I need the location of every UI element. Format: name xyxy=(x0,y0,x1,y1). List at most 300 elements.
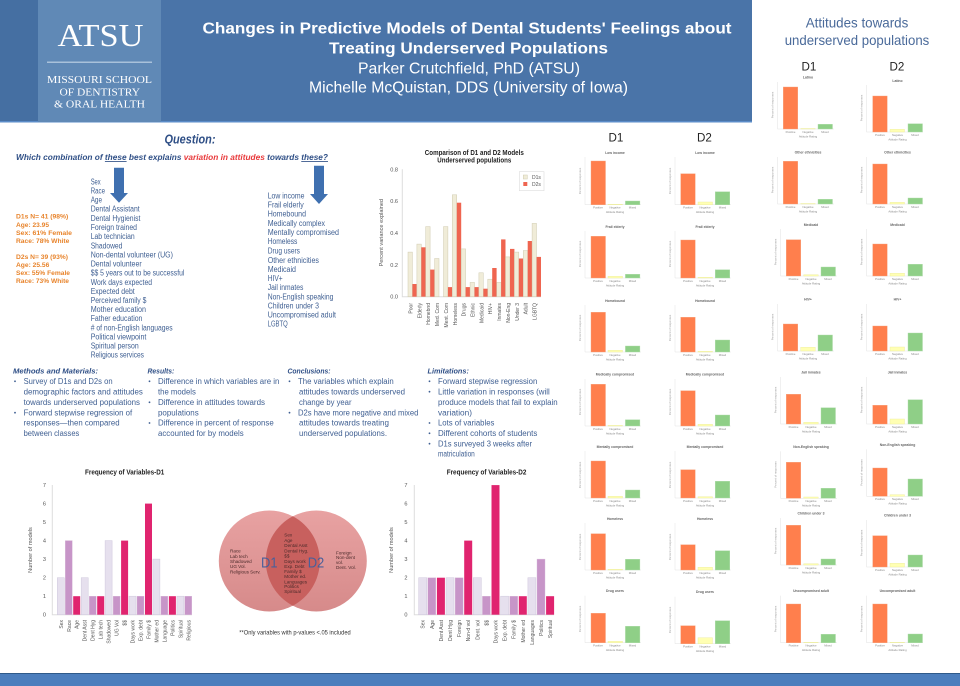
text block: conclusions xyxy=(288,366,418,438)
small chart: uncompromised adult D2: Uncompromised adult xyxy=(880,589,916,593)
predictor variable list: Lab technician xyxy=(91,232,135,241)
venn diagram: D1 and D2 variables: Dental Asst xyxy=(284,543,308,548)
text block: conclusions: D2s have more negative and mixed xyxy=(298,408,418,417)
venn diagram: D1 and D2 variables: Foreign xyxy=(336,550,352,555)
small chart: latino D2: Positive xyxy=(875,133,885,137)
small chart: uncompromised adult D1: Percent of responses xyxy=(774,605,778,632)
underserved population list: Children under 3 xyxy=(268,301,319,310)
small chart: medically compromised D1: Attitude Rating xyxy=(606,431,625,435)
venn diagram: D1 and D2 variables: Dent. Vol. xyxy=(336,565,356,570)
small chart: homebound D1: Attitude Rating xyxy=(606,357,625,361)
small chart: homeless D2: Homeless xyxy=(697,517,713,521)
text block: limitations xyxy=(428,366,558,459)
small chart: frail elderly D1: Negative xyxy=(609,279,621,283)
small chart: non-English speaking D2: Attitude Rating xyxy=(888,502,907,506)
small chart: uncompromised adult D1 xyxy=(774,589,837,652)
bar chart: frequency of variables D1: Dent Asst xyxy=(83,619,89,641)
small chart: other ethnicities D1: Attitude Rating xyxy=(799,209,818,213)
small chart: mentally compromised D1: Percent of responses xyxy=(578,461,582,488)
small chart: low income D2: Mixed xyxy=(719,206,727,210)
bar chart: frequency of variables D1: Politics xyxy=(170,620,176,636)
small chart: other ethnicities D2: Negative xyxy=(892,205,903,209)
small chart: medicaid D1: Positive xyxy=(789,277,799,281)
small chart: homebound D2 xyxy=(668,299,731,361)
small chart: medically compromised D1: Medically compromised xyxy=(596,372,634,376)
sample demographics: Race: 78% White xyxy=(16,238,70,245)
poster title and authors xyxy=(202,20,732,96)
small chart: medicaid D1: Attitude Rating xyxy=(802,281,821,285)
bar chart: frequency of variables D1: Race xyxy=(67,620,73,632)
bar chart: frequency of variables D2: 1 xyxy=(404,594,408,600)
small chart: homebound D2: Negative xyxy=(699,353,711,357)
small chart: frail elderly D2 xyxy=(668,225,731,287)
small chart: latino D2: Attitude Rating xyxy=(888,137,907,141)
small chart: homeless D2: Mixed xyxy=(719,571,727,575)
chart legend xyxy=(519,172,544,191)
bar chart: frequency of variables D1: Dent Hyg xyxy=(91,620,97,641)
small chart: frail elderly D1: Frail elderly xyxy=(605,225,625,229)
small chart: children under 3 D1: Attitude Rating xyxy=(802,570,821,574)
predictor variable list: Foreign trained xyxy=(91,223,137,232)
small chart: HIV+ D1: Positive xyxy=(786,352,796,356)
small chart: homebound D2: Positive xyxy=(683,353,693,357)
predictor variable list: Dental Hygienist xyxy=(91,214,141,223)
arrow: predictors xyxy=(110,168,128,203)
small chart: drug users D1: Attitude Rating xyxy=(606,648,625,652)
text block: results: Results: xyxy=(148,366,175,375)
small chart: medically compromised D1: Percent of responses xyxy=(578,388,582,415)
small chart: other ethnicities D1: Positive xyxy=(786,205,796,209)
small chart: uncompromised adult D2: Percent of responses xyxy=(860,605,864,632)
small chart: HIV+ D2: HIV+ xyxy=(894,298,901,302)
bar chart: comparison of D1 and D2 models: Underserved populations xyxy=(437,158,511,164)
small chart: drug users D2: Percent of responses xyxy=(668,606,672,633)
small chart: other ethnicities D2: Mixed xyxy=(911,205,919,209)
predictor variable list: Work days expected xyxy=(91,278,152,287)
small chart: latino D1 xyxy=(770,76,834,138)
bar chart: comparison of D1 and D2 models: HIV+ xyxy=(488,303,494,314)
bar chart: frequency of variables D1: 3 xyxy=(43,557,46,563)
small chart: jail inmates D1: Negative xyxy=(805,425,817,429)
logo: ATSU Missouri School of Dentistry: MISSOURI SCHOOL xyxy=(47,75,152,86)
text block: conclusions: Conclusions: xyxy=(288,366,331,375)
venn diagram: D1 and D2 variables: Spiritual xyxy=(284,589,301,594)
bar chart: frequency of variables D1: Mother ed xyxy=(154,620,160,643)
small chart: uncompromised adult D2 xyxy=(860,589,923,652)
bar chart: frequency of variables D1: Sex xyxy=(59,620,65,629)
small chart: non-English speaking D1: Positive xyxy=(789,499,799,503)
small chart: non-English speaking D2: Percent of responses xyxy=(860,459,864,486)
sample demographics: Age: 23.95 xyxy=(16,222,49,229)
bar chart: frequency of variables D1: Exp. debt xyxy=(138,619,144,641)
small chart: drug users D2: Positive xyxy=(683,644,693,648)
small chart: non-English speaking D1: Attitude Rating xyxy=(802,504,821,508)
arrow: populations xyxy=(310,166,328,204)
small chart: medically compromised D2: Positive xyxy=(683,427,693,431)
predictor variable list: Spiritual person xyxy=(91,342,139,351)
question heading: Question: xyxy=(164,132,216,146)
small chart: other ethnicities D1: Mixed xyxy=(821,205,829,209)
bar chart: frequency of variables D2: 6 xyxy=(404,502,408,508)
bar chart: frequency of variables D2: Foreign xyxy=(457,620,463,637)
heading: attitudes towards underserved populations: underserved populations xyxy=(785,32,929,48)
small chart: mentally compromised D1 xyxy=(578,445,641,507)
small chart: other ethnicities D2: Other ethnicities xyxy=(884,150,911,154)
small chart: homeless D2: Attitude Rating xyxy=(696,575,715,579)
text block: conclusions: underserved populations. xyxy=(299,429,387,438)
small chart: medicaid D2: Negative xyxy=(892,277,903,281)
text block: methods and materials: Methods and Materials: xyxy=(13,366,99,375)
footer bar xyxy=(0,673,960,686)
small chart: medically compromised D2 xyxy=(668,372,731,435)
bar chart: frequency of variables D1: Shadowed xyxy=(107,620,113,644)
small chart: uncompromised adult D2: Attitude Rating xyxy=(888,648,907,652)
venn diagram: D1 and D2 variables: Sex xyxy=(284,533,293,538)
small chart: medically compromised D2: Negative xyxy=(699,427,711,431)
small chart: homeless D1: Mixed xyxy=(629,571,637,575)
small chart: drug users D2: Negative xyxy=(699,644,711,648)
bar chart: frequency of variables D1: 1 xyxy=(43,594,46,600)
small chart: uncompromised adult D1: Uncompromised adult xyxy=(793,589,830,593)
small chart: other ethnicities D2: Positive xyxy=(875,205,885,209)
small chart: latino D2: Negative xyxy=(892,133,903,137)
underserved population list: Frail elderly xyxy=(268,201,304,210)
venn diagram: D1 and D2 variables: Family $ xyxy=(284,569,302,574)
small chart: medically compromised D1 xyxy=(578,372,641,435)
small chart: drug users D2: Attitude Rating xyxy=(696,649,715,653)
predictor variable list: Expected debt xyxy=(91,287,135,296)
bar chart: frequency of variables D2: Sex xyxy=(421,620,427,629)
small chart: children under 3 D2 xyxy=(860,514,923,576)
small chart: low income D1: Negative xyxy=(609,206,621,210)
small chart: low income D1: Attitude Rating xyxy=(606,210,625,214)
text block: limitations: variation) xyxy=(438,408,472,417)
small chart: frail elderly D2: Negative xyxy=(699,279,711,283)
small chart: HIV+ D2: Negative xyxy=(892,352,903,356)
small chart: medically compromised D2: Mixed xyxy=(719,427,727,431)
small chart: frail elderly D1: Attitude Rating xyxy=(606,283,625,287)
small chart: frail elderly D1: Percent of responses xyxy=(578,240,582,267)
small chart: homeless D1 xyxy=(578,517,641,579)
bar chart: comparison of D1 and D2 models: Poor xyxy=(408,303,414,314)
small chart: HIV+ D2: Percent of responses xyxy=(860,313,864,340)
text block: results: accounted for by models xyxy=(158,429,244,438)
small chart: children under 3 D1: Negative xyxy=(805,566,817,570)
underserved population list: Jail inmates xyxy=(268,283,303,292)
text block: results: the models xyxy=(158,387,196,396)
small chart: other ethnicities D1: Other ethnicities xyxy=(795,150,821,154)
text block: limitations: matriculation xyxy=(438,450,475,459)
bar chart: frequency of variables D1: Frequency of Variables-D1 xyxy=(85,470,164,477)
text block: limitations: D1s surveyed 3 weeks after xyxy=(438,439,532,448)
small chart: children under 3 D2: Negative xyxy=(892,568,903,572)
bar chart: frequency of variables D1: $$ xyxy=(123,620,129,626)
bar chart: frequency of variables D1: Religious xyxy=(186,620,192,641)
small chart: non-English speaking D2: Positive xyxy=(875,497,885,501)
small chart: non-English speaking D2: Mixed xyxy=(911,497,919,501)
small chart: homebound D1: Negative xyxy=(609,353,621,357)
small chart: drug users D1 xyxy=(578,589,641,652)
small chart: homeless D1: Attitude Rating xyxy=(606,575,625,579)
venn diagram: D1 and D2 variables: Age xyxy=(284,538,293,543)
small chart: mentally compromised D2: Negative xyxy=(699,499,711,503)
text block: results: Difference in percent of response xyxy=(158,419,274,428)
bar chart: comparison of D1 and D2 models: 0.6 xyxy=(390,199,398,205)
predictor variable list: Religious services xyxy=(91,351,144,360)
logo: ATSU Missouri School of Dentistry: ATSU xyxy=(58,17,144,53)
small chart: HIV+ D2 xyxy=(860,298,923,360)
bar chart: comparison of D1 and D2 models: Homebnd xyxy=(426,303,432,325)
text block: conclusions: attitudes towards underserved xyxy=(299,387,405,396)
bar chart: frequency of variables D1: Spiritual xyxy=(178,620,184,638)
venn diagram: D1 and D2 variables: Race xyxy=(230,549,241,554)
text block: results: populations xyxy=(158,408,199,417)
bar chart: frequency of variables D2: Dent Hyg xyxy=(448,620,454,641)
bar chart: frequency of variables D1: 4 xyxy=(43,539,46,545)
venn diagram: D1 and D2 variables: vol. xyxy=(336,560,343,565)
poster title and authors: Parker Crutchfield, PhD (ATSU) xyxy=(358,60,580,78)
small chart: mentally compromised D2: Positive xyxy=(683,499,693,503)
small chart: medicaid D1: Negative xyxy=(805,277,817,281)
small chart: children under 3 D2: Children under 3 xyxy=(884,514,911,518)
bar chart: frequency of variables D1: 7 xyxy=(43,483,46,489)
small chart: frail elderly D2: Frail elderly xyxy=(695,225,715,229)
small chart: frail elderly D2: Percent of responses xyxy=(668,240,672,267)
small chart: children under 3 D2: Positive xyxy=(875,568,885,572)
sample demographics: Sex: 61% Female xyxy=(16,230,72,237)
small chart: jail inmates D1: Positive xyxy=(789,425,799,429)
small chart: low income D2: Attitude Rating xyxy=(696,210,715,214)
sample demographics: Sex: 55% Female xyxy=(16,270,70,277)
small chart: HIV+ D1 xyxy=(770,298,834,360)
text block: limitations: Different cohorts of students xyxy=(438,429,537,438)
column heading: D2 left: D2 xyxy=(697,132,712,145)
text block: results: Difference in which variables are in xyxy=(158,377,279,386)
bar chart: frequency of variables D1: 5 xyxy=(43,520,46,526)
small chart: children under 3 D2: Mixed xyxy=(911,568,919,572)
sample demographics xyxy=(16,214,72,285)
bar chart: frequency of variables D2: 2 xyxy=(404,576,408,582)
chart legend: D2s xyxy=(532,182,541,188)
small chart: jail inmates D2: Negative xyxy=(892,425,903,429)
small chart: homeless D1: Negative xyxy=(609,571,621,575)
bar chart: comparison of D1 and D2 models: Adult xyxy=(524,302,530,314)
small chart: medically compromised D1: Mixed xyxy=(629,427,637,431)
small chart: low income D2: Negative xyxy=(699,206,711,210)
underserved population list: Mentally compromised xyxy=(268,228,339,237)
predictor variable list: Sex xyxy=(91,177,101,186)
small chart: medically compromised D2: Medically compromised xyxy=(686,372,724,376)
small chart: jail inmates D1 xyxy=(774,370,837,433)
small chart: medically compromised D1: Positive xyxy=(593,427,603,431)
small chart: non-English speaking D2: Negative xyxy=(892,497,903,501)
predictor variable list: Age xyxy=(91,196,102,205)
predictor variable list: $$ 5 years out to be successful xyxy=(91,269,185,278)
small chart: homeless D1: Homeless xyxy=(607,517,623,521)
small chart: latino D1: Latino xyxy=(803,76,813,80)
header banner xyxy=(0,0,752,122)
venn diagram: D1 and D2 variables: Non-dent xyxy=(336,555,356,560)
small chart: uncompromised adult D1: Mixed xyxy=(824,644,832,648)
predictor variable list xyxy=(91,177,185,360)
predictor variable list: Dental Assistant xyxy=(91,205,140,214)
text block: conclusions: The variables which explain xyxy=(298,377,394,386)
bar chart: frequency of variables D2: Days work xyxy=(494,620,500,643)
bar chart: comparison of D1 and D2 models: Under 3 xyxy=(515,303,521,321)
question sentence: Which combination of these best explains variation in attitudes towards these? xyxy=(16,152,328,162)
small chart: drug users D2: Drug users xyxy=(696,590,714,594)
small chart: HIV+ D1: Negative xyxy=(802,352,814,356)
bar chart: comparison of D1 and D2 models: Homeless xyxy=(453,303,459,325)
underserved population list: Medically complex xyxy=(268,219,325,228)
bar chart: frequency of variables D1: Lab tech xyxy=(99,620,105,639)
small chart: other ethnicities D2: Percent of responses xyxy=(860,166,864,193)
bar chart: comparison of D1 and D2 models: Drugs xyxy=(462,303,468,316)
bar chart: frequency of variables D1: 0 xyxy=(43,613,46,619)
heading: attitudes towards underserved populations xyxy=(785,14,929,48)
bar chart: frequency of variables D1: Language xyxy=(162,620,168,642)
text block: methods and materials: towards underserved populations xyxy=(24,398,140,407)
small chart: homebound D2: Homebound xyxy=(695,299,715,303)
small chart: medicaid D1: Mixed xyxy=(824,277,832,281)
small chart: children under 3 D1: Percent of responses xyxy=(774,527,778,554)
small chart: non-English speaking D1: Percent of responses xyxy=(774,461,778,488)
bar chart: frequency of variables D2: Family $ xyxy=(512,620,518,639)
small chart: non-English speaking D1 xyxy=(774,445,837,508)
bar chart: frequency of variables D2: Spiritual xyxy=(548,620,554,638)
bar chart: frequency of variables D2: Languages xyxy=(530,620,536,645)
small chart: low income D1: Mixed xyxy=(629,206,637,210)
small chart: jail inmates D1: Mixed xyxy=(824,425,832,429)
text block: conclusions: attitudes towards treating xyxy=(299,419,389,428)
small chart: low income D2 xyxy=(668,151,731,214)
venn diagram: D1 and D2 variables: Exp. Debt xyxy=(284,564,305,569)
small chart: non-English speaking D1: Negative xyxy=(805,499,817,503)
bar chart: frequency of variables D2: Politics xyxy=(539,620,545,636)
small chart: latino D2: Percent of responses xyxy=(860,94,864,121)
small chart: jail inmates D2: Mixed xyxy=(911,425,919,429)
underserved population list: Low income xyxy=(268,191,305,200)
poster title and authors: Treating Underserved Populations xyxy=(329,40,608,58)
venn diagram: D1 and D2 variables: Religious Serv. xyxy=(230,570,261,575)
small chart: low income D1: Positive xyxy=(593,206,603,210)
small chart: drug users D1: Percent of responses xyxy=(578,605,582,632)
bar chart: frequency of variables D2: Number of models xyxy=(389,527,395,573)
small chart: low income D2: Positive xyxy=(683,206,693,210)
bar chart: comparison of D1 and D2 models: Med. Com xyxy=(435,303,441,326)
small chart: drug users D2 xyxy=(668,590,731,653)
small chart: frail elderly D2: Mixed xyxy=(719,279,727,283)
logo: ATSU Missouri School of Dentistry xyxy=(38,0,161,122)
small chart: uncompromised adult D2: Mixed xyxy=(911,644,919,648)
small chart: jail inmates D2: Percent of responses xyxy=(860,386,864,413)
underserved population list: Medicaid xyxy=(268,265,296,274)
small chart: HIV+ D2: Positive xyxy=(875,352,885,356)
bar chart: comparison of D1 and D2 models: Ethnic xyxy=(470,303,476,317)
underserved population list: Homeless xyxy=(268,237,297,246)
small chart: medically compromised D2: Percent of responses xyxy=(668,388,672,415)
small chart: uncompromised adult D1: Positive xyxy=(789,644,799,648)
small chart: jail inmates D1: Attitude Rating xyxy=(802,429,821,433)
small chart: homeless D1: Positive xyxy=(593,571,603,575)
venn diagram: D1 and D2 variables: Dental Hyg. xyxy=(284,548,308,553)
small chart: drug users D1: Mixed xyxy=(629,644,637,648)
small chart: latino D1: Percent of responses xyxy=(770,91,774,118)
small chart: HIV+ D2: Attitude Rating xyxy=(888,356,907,360)
bar chart: frequency of variables D1: Family $ xyxy=(146,620,152,639)
small chart: latino D1: Attitude Rating xyxy=(799,134,818,138)
predictor variable list: Shadowed xyxy=(91,242,122,251)
sample demographics: D2s N= 39 (93%) xyxy=(16,254,68,261)
small chart: other ethnicities D1 xyxy=(770,150,834,213)
small chart: uncompromised adult D1: Negative xyxy=(805,644,817,648)
small chart: homeless D2: Percent of responses xyxy=(668,533,672,560)
bar chart: frequency of variables D2: Dent. vol xyxy=(475,620,481,640)
small chart: latino D1: Negative xyxy=(802,130,814,134)
predictor variable list: Race xyxy=(91,186,105,196)
bar chart: frequency of variables D1: Number of models xyxy=(28,527,34,573)
bar chart: frequency of variables D2: 7 xyxy=(404,483,408,489)
underserved population list: Uncompromised adult xyxy=(268,311,337,320)
small chart: mentally compromised D2: Percent of responses xyxy=(668,461,672,488)
small chart: latino D1: Positive xyxy=(786,130,796,134)
small chart: jail inmates D2: Jail inmates xyxy=(888,370,907,374)
small chart: medicaid D2: Attitude Rating xyxy=(888,281,907,285)
small chart: mentally compromised D2: Mixed xyxy=(719,499,727,503)
small chart: jail inmates D2: Positive xyxy=(875,425,885,429)
bar chart: frequency of variables D2: Exp. debt xyxy=(503,619,509,641)
small chart: mentally compromised D1: Attitude Rating xyxy=(606,503,625,507)
small chart: children under 3 D2: Attitude Rating xyxy=(888,572,907,576)
bar chart: frequency of variables D2: Dent Asst xyxy=(439,619,445,641)
bar chart: frequency of variables D1: Days work xyxy=(130,620,136,643)
small chart: medicaid D1 xyxy=(774,223,837,285)
small chart: other ethnicities D1: Percent of responses xyxy=(770,166,774,193)
bar chart: comparison of D1 and D2 models: Elderly xyxy=(417,303,423,318)
predictor variable list: Non-dental volunteer (UG) xyxy=(91,250,173,260)
bar chart: frequency of variables D1 xyxy=(28,470,192,644)
poster title and authors: Michelle McQuistan, DDS (University of Iowa) xyxy=(309,80,628,96)
bar chart: comparison of D1 and D2 models: Inmates xyxy=(497,303,503,321)
small chart: latino D1: Mixed xyxy=(821,130,829,134)
bar chart: frequency of variables D2: Frequency of Variables-D2 xyxy=(447,470,526,477)
underserved population list: Non-English speaking xyxy=(268,292,333,301)
bar chart: comparison of D1 and D2 models xyxy=(379,150,544,327)
underserved population list: HIV+ xyxy=(268,274,283,283)
predictor variable list: Political viewpoint xyxy=(91,332,147,341)
small chart: medicaid D2: Medicaid xyxy=(890,223,905,227)
small chart: drug users D1: Negative xyxy=(609,644,621,648)
text block: limitations: Little variation in responses (will xyxy=(438,387,550,396)
small chart: other ethnicities D2 xyxy=(860,150,923,213)
small chart: drug users D1: Positive xyxy=(593,644,603,648)
small chart: medicaid D2: Positive xyxy=(875,277,885,281)
small chart: homeless D2 xyxy=(668,517,731,579)
chart legend: D1s xyxy=(532,175,541,181)
small chart: homebound D1: Homebound xyxy=(605,299,625,303)
predictor variable list: Father education xyxy=(91,314,142,323)
small chart: mentally compromised D1: Positive xyxy=(593,499,603,503)
bar chart: comparison of D1 and D2 models: 0.0 xyxy=(390,295,398,301)
small chart: homebound D1 xyxy=(578,299,641,361)
bar chart: comparison of D1 and D2 models: 0.2 xyxy=(390,263,398,269)
small chart: mentally compromised D2: Attitude Rating xyxy=(696,503,715,507)
heading: attitudes towards underserved populations: Attitudes towards xyxy=(806,14,908,30)
small chart: frail elderly D1: Positive xyxy=(593,279,603,283)
small chart: frail elderly D2: Attitude Rating xyxy=(696,283,715,287)
small chart: latino D2 xyxy=(860,79,923,141)
small chart: low income D1 xyxy=(578,151,641,214)
